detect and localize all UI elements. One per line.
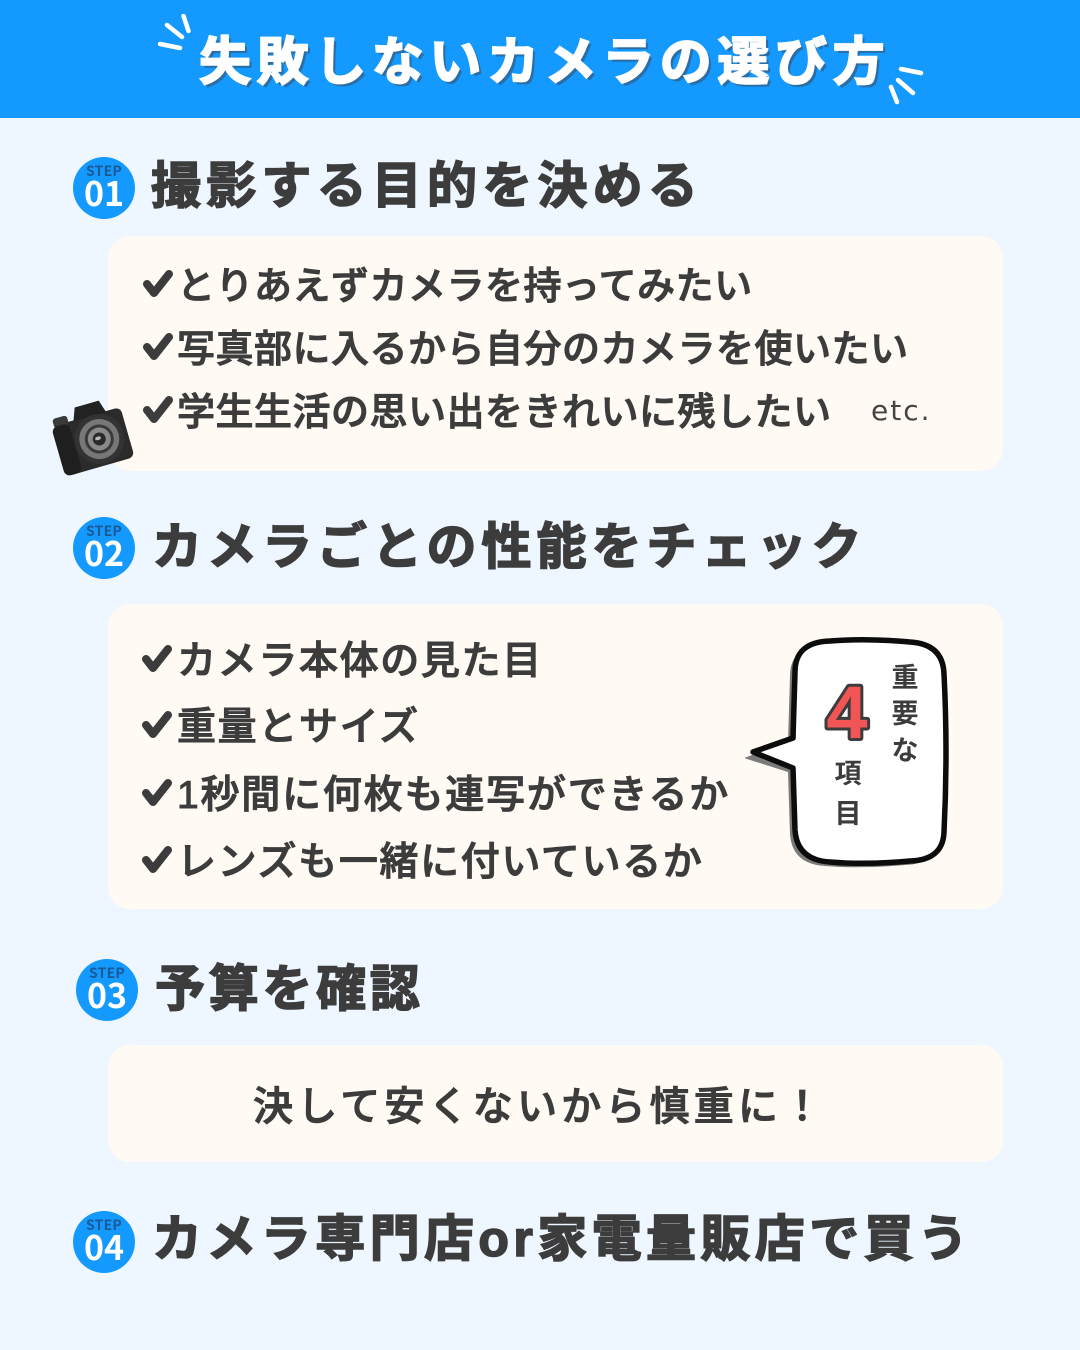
step 1 item 1: とりあえずカメラを持ってみたい — [177, 266, 753, 308]
title: 失敗しないカメラの選び方 — [199, 34, 890, 92]
header band — [0, 0, 1080, 118]
callout text: 項目: 項 — [834, 759, 862, 789]
panel: step 3 — [108, 1045, 1003, 1162]
step 1 item 3: 学生生活の思い出をきれいに残したい — [177, 392, 832, 434]
step 2 badge — [73, 517, 135, 579]
step 2 badge: 02 — [84, 527, 124, 576]
step 3 heading: 予算を確認 — [155, 961, 424, 1017]
step 2 item 4: レンズも一緒に付いているか — [177, 841, 704, 884]
step 1 heading: 撮影する目的を決める — [151, 158, 703, 214]
callout text: 重要な — [892, 663, 918, 766]
callout text: 項目 — [834, 759, 862, 829]
icon: sparkle lines — [158, 14, 924, 104]
step 2 item 1: カメラ本体の見た目 — [177, 640, 543, 683]
bubble body — [753, 640, 946, 863]
bubble shadow — [744, 644, 941, 867]
panel: step 2 — [108, 604, 1003, 909]
step 4 badge: STEP — [86, 1215, 122, 1235]
step 1 badge — [73, 157, 135, 219]
callout text: 重要な: 重 — [892, 663, 918, 693]
icon: camera — [52, 400, 134, 476]
step 3 badge: 03 — [87, 969, 127, 1018]
step 1 badge: 01 — [84, 167, 124, 216]
step 4 badge: 04 — [84, 1221, 124, 1270]
callout text: 重要な: 要 — [892, 699, 918, 729]
panel: step 1 — [108, 236, 1003, 471]
step 2 item 3: 1秒間に何枚も連写ができるか — [177, 774, 730, 817]
step 1 badge: STEP — [86, 161, 122, 181]
step 3 badge: STEP — [89, 963, 125, 983]
callout text: 項目: 目 — [834, 799, 862, 829]
callout number: 4 — [826, 671, 868, 754]
step 1 item 2: 写真部に入るから自分のカメラを使いたい — [177, 329, 909, 371]
step 4 badge — [73, 1211, 135, 1273]
etc label: etc. — [871, 394, 932, 427]
step 2 heading: カメラごとの性能をチェック — [152, 519, 866, 575]
step 3 text: 決して安くないから慎重に！ — [253, 1085, 826, 1129]
step 2 item 2: 重量とサイズ — [177, 706, 420, 749]
step 2 badge: STEP — [86, 521, 122, 541]
step 3 badge — [76, 959, 138, 1021]
callout: speech bubble — [745, 637, 949, 868]
callout text: 重要な: な — [892, 736, 918, 766]
step 4 heading: カメラ専門店or家電量販店で買う — [152, 1211, 972, 1267]
